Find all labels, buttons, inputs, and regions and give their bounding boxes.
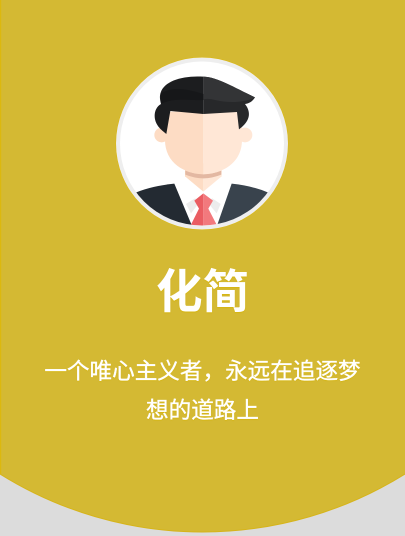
description text: 想的道路上 [146,398,259,423]
suit jacket [136,184,192,227]
ears [154,128,165,142]
description text: 一个唯心主义者，永远在追逐梦 [44,359,361,384]
description text [44,359,361,423]
neck [185,170,204,192]
title: 化简 [156,266,249,318]
face [165,112,203,174]
hair [155,76,203,134]
shirt [185,176,222,192]
icon: avatar portrait in circle [116,57,288,230]
tie [190,193,203,227]
